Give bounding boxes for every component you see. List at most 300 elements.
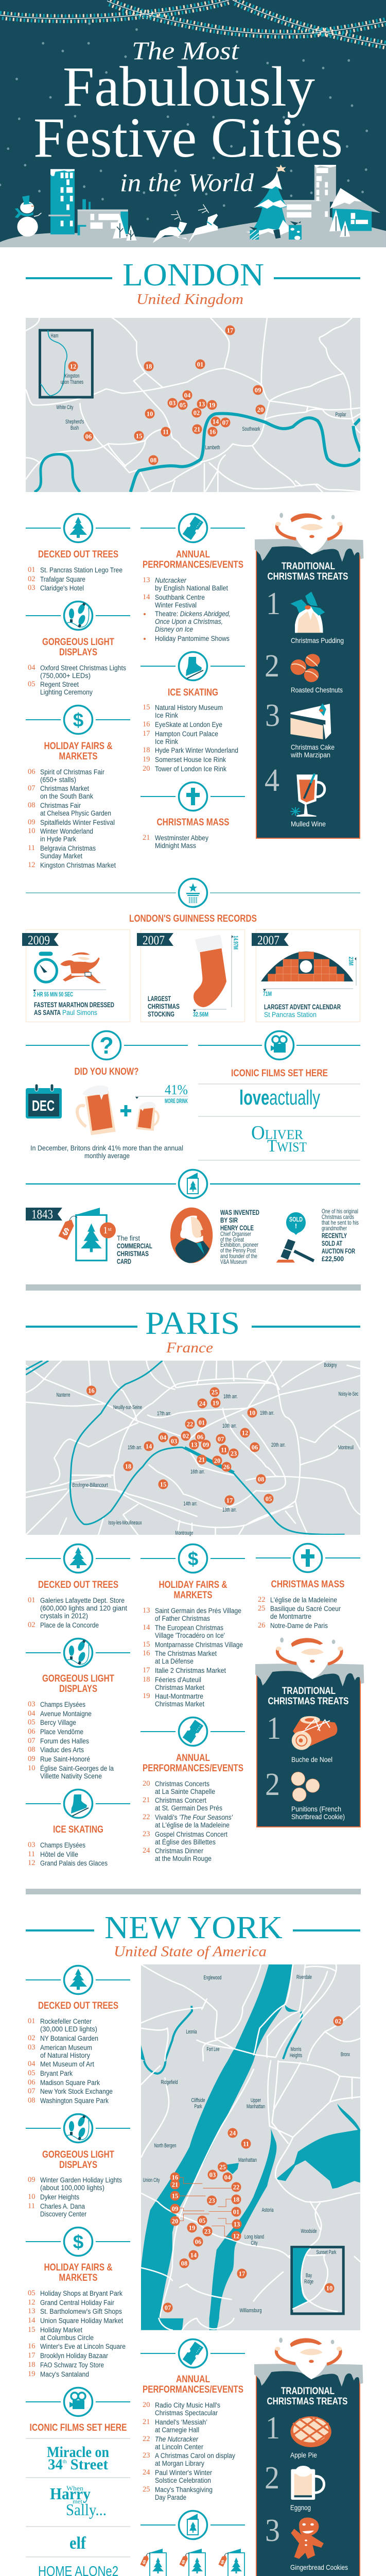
list: fairs: 14 <box>143 1623 150 1632</box>
icon: sold bubble: SOLD <box>289 1215 303 1223</box>
heading: light displays: GORGEOUS LIGHT <box>42 636 114 648</box>
list: skating: 11 <box>28 1850 35 1858</box>
list: ice skating: Ice Rink <box>155 738 178 745</box>
map markers: 21 <box>172 2181 178 2189</box>
list: trees: Trafalgar Square <box>40 575 85 583</box>
list: skating <box>28 1841 108 1867</box>
icon: cross <box>179 782 207 811</box>
map markers: 21 <box>194 426 200 433</box>
list: performances: Holiday Pantomime Shows <box>155 635 230 642</box>
list: trees: of Natural History <box>40 2052 90 2059</box>
list: trees: Galeries Lafayette Dept. Store <box>40 1597 125 1604</box>
map markers: 14 <box>146 1443 152 1450</box>
map place labels: Riverdale <box>296 1974 312 1980</box>
map markers: 25 <box>212 1389 218 1396</box>
map markers: 04 <box>224 2174 231 2181</box>
list: performances: Day Parade <box>155 2494 186 2501</box>
list: lights: Oxford Street Christmas Lights <box>40 664 126 672</box>
map markers: 18 <box>146 363 152 370</box>
list: trees <box>28 2017 113 2105</box>
list: lights: Avenue Montaigne <box>40 1710 92 1718</box>
list: fairs: Montparnasse Christmas Village <box>155 1641 243 1649</box>
heading: did you know: DID YOU KNOW? <box>74 1066 139 1077</box>
list: lights: Charles A. Dana <box>40 2202 85 2210</box>
icon: tree <box>64 1545 93 1572</box>
list: lights: Église Saint-Georges de la <box>40 1765 114 1772</box>
map markers: 19 <box>189 2225 195 2232</box>
treat: mulled wine: Mulled Wine <box>291 820 326 828</box>
map place labels: Issy-les-Moulineaux <box>108 1520 142 1526</box>
list: trees: 01 <box>28 566 35 574</box>
heading: fairs <box>44 2262 112 2283</box>
stat: 41 percent: MORE DRINK <box>165 1098 188 1105</box>
list: ice skating: 16 <box>143 720 150 728</box>
icon: lights <box>64 602 93 630</box>
panel: performances Paris <box>141 1718 245 1862</box>
section: New York <box>26 1910 363 2576</box>
map markers: 26 <box>223 1463 230 1470</box>
heading: treats: TRADITIONAL <box>282 561 335 572</box>
map markers: 07 <box>222 419 229 427</box>
icon: santa over ledge <box>255 1637 364 1686</box>
panel: christmas mass <box>141 782 245 850</box>
map markers: 14 <box>213 418 219 426</box>
icon: question mark <box>93 1031 120 1059</box>
text: inventor: WAS INVENTED <box>220 1209 259 1216</box>
list: lights: Lighting Ceremony <box>40 688 93 696</box>
treat: mulled wine: 4 <box>265 763 279 798</box>
text: inventor <box>220 1209 259 1265</box>
icon: santa over ledge <box>254 2337 363 2386</box>
heading: films: ICONIC FILMS SET HERE <box>30 2422 127 2433</box>
map markers: 01 <box>197 361 203 368</box>
list: trees: Bryant Park <box>40 2070 73 2077</box>
list: lights: (750,000+ LEDs) <box>40 672 91 680</box>
map place labels: Upper <box>251 2097 261 2104</box>
icon: dollar <box>64 2228 93 2256</box>
list: lights: Winter Garden Holiday Lights <box>40 2176 122 2184</box>
list: fairs: of Father Christmas <box>155 1615 210 1622</box>
map markers: 06 <box>85 433 92 440</box>
treat: buche de noel <box>267 1711 337 1764</box>
list: performances: by English National Ballet <box>155 584 228 592</box>
list: performances: at St. Germain Des Prés <box>155 1804 222 1812</box>
map markers: 24 <box>199 1400 206 1408</box>
map place labels: Bobigny <box>324 1362 337 1368</box>
record: fastest marathon <box>22 929 130 1022</box>
map markers: 13 <box>234 2221 240 2228</box>
list: performances: at Église des Billettes <box>155 1838 216 1846</box>
heading: decked out trees: DECKED OUT TREES <box>38 549 118 560</box>
panel: christmas mass Paris <box>256 1544 360 1630</box>
icon: cross <box>293 1544 322 1572</box>
list: lights: Rue Saint-Honoré <box>40 1755 90 1763</box>
list: performances: Once Upon a Christmas, <box>155 618 223 625</box>
map place labels: Bush <box>71 425 79 431</box>
text: inventor: and founder of the <box>220 1252 257 1260</box>
treat: gingerbread <box>265 2513 348 2571</box>
record: largest advent calendar: 2007 <box>257 934 279 947</box>
map markers: 21 <box>199 1456 205 1463</box>
list: fairs: 16 <box>143 1649 150 1657</box>
list: fairs: Spirit of Christmas Fair <box>40 768 104 776</box>
heading: treats: TRADITIONAL <box>282 1685 336 1697</box>
map markers: 19 <box>209 402 215 409</box>
text: first card: The first <box>117 1234 140 1242</box>
list: lights: Bercy Village <box>40 1719 76 1726</box>
map place labels: 16th arr. <box>190 1469 205 1475</box>
treat: gingerbread: 3 <box>265 2513 280 2548</box>
list: trees: 01 <box>28 2017 35 2025</box>
list: fairs: on the South Bank <box>40 792 93 800</box>
map markers: 17 <box>226 1497 233 1504</box>
list: performances: at Lincoln Center <box>155 2443 203 2451</box>
text: sold at auction: grandmother <box>322 1225 347 1232</box>
panel: first commercial christmas card <box>26 1170 360 1265</box>
list: trees: 01 <box>28 1596 35 1604</box>
map markers: 23 <box>204 2228 210 2235</box>
map markers: 10 <box>249 1410 255 1417</box>
list: performances: 21 <box>143 2418 150 2426</box>
list: fairs: Spitalfields Winter Festival <box>40 819 115 826</box>
list: ice skating: Hampton Court Palace <box>155 730 218 738</box>
map place labels: Lambeth <box>205 445 220 451</box>
treat: apple pie: 1 <box>266 2411 280 2446</box>
map place labels: Heights <box>290 2053 302 2059</box>
icon: card ring <box>179 1170 207 1198</box>
badge: 1st: 1 <box>103 1225 108 1236</box>
list: mass <box>143 834 208 850</box>
list: fairs: St. Bartholomew's Gift Shops <box>40 2308 122 2315</box>
icon: beer mugs <box>77 1086 159 1135</box>
list: fairs: 10 <box>28 827 35 835</box>
heading: light displays <box>42 636 114 658</box>
record: largest advent calendar <box>252 929 360 1022</box>
list: fairs: Italie 2 Christmas Market <box>155 1667 226 1674</box>
text: first card: CHRISTMAS <box>117 1250 149 1258</box>
map place labels: Williamsburg <box>240 2308 261 2314</box>
film title: Miracle on 34th Street <box>47 2444 109 2473</box>
list: fairs: at Chelsea Physic Garden <box>40 809 111 817</box>
map markers <box>163 2016 343 2312</box>
record: fastest marathon: 2009 <box>28 934 50 947</box>
list: fairs: 15 <box>28 2326 35 2334</box>
illustration: first card <box>58 1208 107 1261</box>
record: fastest marathon: FASTEST MARATHON DRESSED <box>34 1001 114 1009</box>
map place labels: Morris <box>290 2046 302 2053</box>
record: largest stocking <box>137 929 245 1022</box>
heading: trees: DECKED OUT TREES <box>38 1579 118 1590</box>
list: fairs <box>28 2289 126 2378</box>
list: fairs: 16 <box>28 2342 35 2350</box>
list: mass: Westminster Abbey <box>155 834 208 842</box>
icon: dollar <box>64 706 93 734</box>
heading: iconic films: ICONIC FILMS SET HERE <box>231 1067 328 1079</box>
list: performances <box>143 1780 233 1862</box>
list: fairs: 12 <box>28 2298 35 2307</box>
icon: sold bubble <box>286 1212 306 1235</box>
list: performances: 24 <box>143 1846 150 1855</box>
list: fairs: Saint Germain des Prés Village <box>155 1607 241 1615</box>
list: fairs: 11 <box>28 844 35 852</box>
list: trees: 02 <box>28 2034 35 2042</box>
text: sold at auction: RECENTLY <box>322 1232 347 1240</box>
list: trees: (600,000 lights and 120 giant <box>40 1604 127 1612</box>
list: fairs: Macy's Santaland <box>40 2370 89 2378</box>
panel: holiday fairs and markets <box>26 706 130 869</box>
map markers: 04 <box>184 392 191 399</box>
list: performances <box>143 2401 235 2501</box>
list: performances: 24 <box>143 2468 150 2477</box>
panel: decked out trees <box>26 514 130 592</box>
list: performances: 23 <box>143 1830 150 1838</box>
panel: holiday cards chart <box>140 2511 245 2576</box>
list: performances: at Carnegie Hall <box>155 2426 199 2434</box>
list: fairs: Holiday Market <box>40 2326 82 2334</box>
map place labels: 17th arr. <box>157 1411 171 1417</box>
list: mass: Midnight Mass <box>155 842 196 850</box>
list: fairs: Sunday Market <box>40 852 82 860</box>
panel: light displays Paris <box>26 1638 130 1780</box>
heading: fairs: MARKETS <box>59 2272 98 2283</box>
header: title banner <box>0 0 386 247</box>
heading: fairs: MARKETS <box>174 1589 212 1601</box>
map markers: 22 <box>233 2183 239 2191</box>
panel: gorgeous light displays <box>26 602 130 696</box>
list: lights: 10 <box>28 2193 35 2201</box>
list: fairs: (650+ stalls) <box>40 776 76 784</box>
map markers: 08 <box>181 2260 187 2267</box>
ribbon: 1843: 1843 <box>31 1208 53 1222</box>
icon: gavel <box>276 1239 314 1263</box>
list: fairs: 07 <box>28 784 35 792</box>
map markers: 11 <box>163 429 169 436</box>
list: lights: Villette Nativity Scene <box>40 1772 102 1780</box>
icon: lights <box>64 2114 93 2142</box>
stat: 41 percent: 41% <box>165 1082 188 1097</box>
list: performances: 23 <box>143 2451 150 2460</box>
film title: Miracle on 34th Street: Miracle on <box>47 2444 109 2461</box>
list: trees: (30,000 LED lights) <box>40 2025 97 2033</box>
list: ice skating: Somerset House Ice Rink <box>155 756 226 764</box>
map markers: 02 <box>335 2018 341 2025</box>
list: fairs: Christmas Fair <box>40 802 81 809</box>
heading: performances <box>143 2374 243 2395</box>
record: largest stocking: 14.97M <box>232 936 238 950</box>
list: performances: A Christmas Carol on display <box>155 2452 235 2460</box>
heading: treats: CHRISTMAS TREATS <box>268 571 348 582</box>
list: lights: Forum des Halles <box>40 1737 89 1745</box>
city title: London: LONDON <box>122 258 264 293</box>
city title: New York <box>26 1910 360 1960</box>
heading: fairs: HOLIDAY FAIRS & <box>44 740 112 752</box>
icon: film camera <box>266 1031 293 1059</box>
list: fairs: Haut-Montmartre <box>155 1692 203 1700</box>
list: trees: 05 <box>28 2069 35 2077</box>
list: fairs: at Columbus Circle <box>40 2334 94 2342</box>
map markers: 22 <box>187 1421 193 1428</box>
list: ice skating: EyeSkate at London Eye <box>155 721 222 728</box>
map markers: 09 <box>255 386 261 394</box>
list: trees: Met Museum of Art <box>40 2060 94 2068</box>
panel: traditional christmas treats <box>255 513 363 839</box>
heading: fairs: MARKETS <box>59 751 98 762</box>
list: lights: 03 <box>28 1700 35 1708</box>
map markers: 20 <box>214 1457 220 1464</box>
list: fairs: 05 <box>28 2289 35 2297</box>
list: lights <box>28 1700 114 1780</box>
list: performances: 22 <box>143 1813 150 1821</box>
text: sold at auction <box>322 1208 359 1263</box>
list: skating: Grand Palais des Glaces <box>40 1859 108 1867</box>
map markers: 02 <box>194 409 200 416</box>
list: ice skating: 20 <box>143 765 150 773</box>
list: performances: 22 <box>143 2435 150 2443</box>
map place labels: Ham <box>50 333 59 339</box>
record: largest stocking: LARGEST <box>148 995 171 1003</box>
icon: dollar <box>179 1545 207 1572</box>
list: trees: crystals in 2012) <box>40 1612 88 1620</box>
title text: Festive Cities <box>33 106 343 169</box>
list: performances: Gospel Christmas Concert <box>155 1831 227 1838</box>
map markers: 16 <box>172 2174 178 2181</box>
map place labels: City <box>251 2240 258 2246</box>
list: lights: (about 100,000 lights) <box>40 2184 104 2192</box>
heading: treats: CHRISTMAS TREATS <box>267 2396 348 2407</box>
heading: fairs <box>159 1579 227 1601</box>
map markers: 13 <box>199 401 205 408</box>
list: ice skating: 17 <box>143 730 150 738</box>
map markers: 06 <box>197 1433 203 1440</box>
list: trees: Claridge's Hotel <box>40 584 84 592</box>
map markers: 02 <box>183 1432 189 1439</box>
city title: New York: NEW YORK <box>104 1910 283 1945</box>
film title: When Harry Met Sally: Harry <box>50 2484 91 2503</box>
map markers: 14 <box>190 2251 197 2259</box>
list: performances: Paul Winter's Winter <box>155 2469 212 2477</box>
treat: cake <box>265 698 335 759</box>
heading: performances <box>143 1752 243 1774</box>
record: fastest marathon: AS SANTA <box>34 1009 61 1016</box>
film title: Oliver Twist <box>251 1122 307 1156</box>
section: London <box>22 258 363 1265</box>
list: performances: at the Moulin Rouge <box>155 1855 212 1862</box>
map markers: 24 <box>230 2130 236 2137</box>
list: ice skating: Hyde Park Winter Wonderland <box>155 747 238 754</box>
list: ice skating: Tower of London Ice Rink <box>155 765 226 773</box>
list: performances: Southbank Centre <box>155 594 205 601</box>
map markers: 16 <box>88 1387 95 1394</box>
panel: light displays New York <box>26 2114 130 2218</box>
treat: cake: 3 <box>265 698 280 733</box>
map markers: 17 <box>227 327 233 334</box>
list: performances: at Morgan Library <box>155 2460 204 2467</box>
map place labels: Manhattan <box>247 2104 265 2110</box>
icon: card ring <box>179 2511 207 2539</box>
list: fairs: Féeries d'Auteuil <box>155 1676 201 1684</box>
list: lights: 05 <box>28 680 35 688</box>
city title: Paris: PARIS <box>145 1306 240 1341</box>
list: fairs: in Hyde Park <box>40 835 76 843</box>
map markers: 03 <box>209 2171 216 2178</box>
map place labels: Sunset Park <box>316 2249 337 2256</box>
list: ice skating: 18 <box>143 746 150 754</box>
map place labels: Shepherd's <box>65 419 84 425</box>
heading: performances: ANNUAL <box>176 2374 210 2385</box>
list: skating: 12 <box>28 1859 35 1867</box>
list: mass: Notre-Dame de Paris <box>270 1622 328 1630</box>
map place labels: 20th arr. <box>271 1442 286 1448</box>
map place labels: 14th arr. <box>183 1501 198 1507</box>
list: mass <box>258 1596 341 1630</box>
list: trees: Place de la Concorde <box>40 1621 99 1629</box>
list: fairs: Winter Wonderland <box>40 827 93 835</box>
map place labels: White City <box>57 404 74 411</box>
list: lights: 11 <box>28 2202 35 2210</box>
treat: eggnog: 2 <box>265 2461 279 2496</box>
list: trees <box>28 566 122 592</box>
list: performances: Solstice Celebration <box>155 2477 211 2484</box>
text: inventor: of the Great <box>220 1236 244 1243</box>
heading: light displays: DISPLAYS <box>59 647 97 658</box>
city title: London: United Kingdom <box>136 292 243 308</box>
list: lights: 08 <box>28 1745 35 1754</box>
divider <box>26 1284 361 1291</box>
map markers: 23 <box>231 1450 237 1457</box>
heading: treats: CHRISTMAS TREATS <box>268 1696 349 1707</box>
map markers: 09 <box>203 1442 209 1449</box>
stat: 41 percent <box>135 1082 188 1105</box>
map markers: 08 <box>150 456 156 464</box>
treat: apple pie <box>266 2411 331 2459</box>
map place labels: 18th arr. <box>223 1394 238 1400</box>
icon: plus <box>120 1105 131 1116</box>
map place labels <box>57 1362 359 1536</box>
list: fairs: 14 <box>28 2316 36 2325</box>
city title: Paris <box>26 1306 360 1356</box>
list: trees: 08 <box>28 2096 35 2105</box>
map place labels <box>50 333 346 451</box>
list: ice skating: 15 <box>143 703 150 711</box>
city title: London <box>26 258 360 308</box>
map markers: 19 <box>213 1399 219 1406</box>
record: largest advent calendar: 23M <box>347 957 354 965</box>
map markers: 12 <box>70 363 76 370</box>
list: fairs: Belgravia Christmas <box>40 844 96 852</box>
title text: in the World <box>120 168 254 197</box>
film title: When Harry Met Sally: met <box>73 2498 83 2505</box>
heading: lights: DISPLAYS <box>59 1683 97 1694</box>
heading: christmas mass: CHRISTMAS MASS <box>156 817 230 828</box>
treat: punitions <box>265 1767 345 1821</box>
text: sold at auction: Christmas cards <box>322 1213 354 1221</box>
map markers: 05 <box>180 402 186 409</box>
map markers: 04 <box>160 1434 167 1442</box>
map markers: 08 <box>258 1476 264 1483</box>
treat: apple pie: Apple Pie <box>290 2451 317 2459</box>
record: largest stocking: STOCKING <box>148 1010 174 1018</box>
record: fastest marathon: 2 HR 55 MIN 50 SEC <box>33 992 73 998</box>
heading: treats <box>268 1685 349 1707</box>
winter town scene <box>0 164 386 247</box>
map markers: 09 <box>172 2205 178 2212</box>
map place labels: Noisy-le-Sec <box>339 1391 359 1397</box>
map place labels: 13th arr. <box>222 1507 237 1513</box>
title text <box>33 36 343 197</box>
heading: mass: CHRISTMAS MASS <box>271 1579 345 1590</box>
list: lights: Regent Street <box>40 681 79 688</box>
list: performances: Macy's Thanksgiving <box>155 2486 213 2494</box>
